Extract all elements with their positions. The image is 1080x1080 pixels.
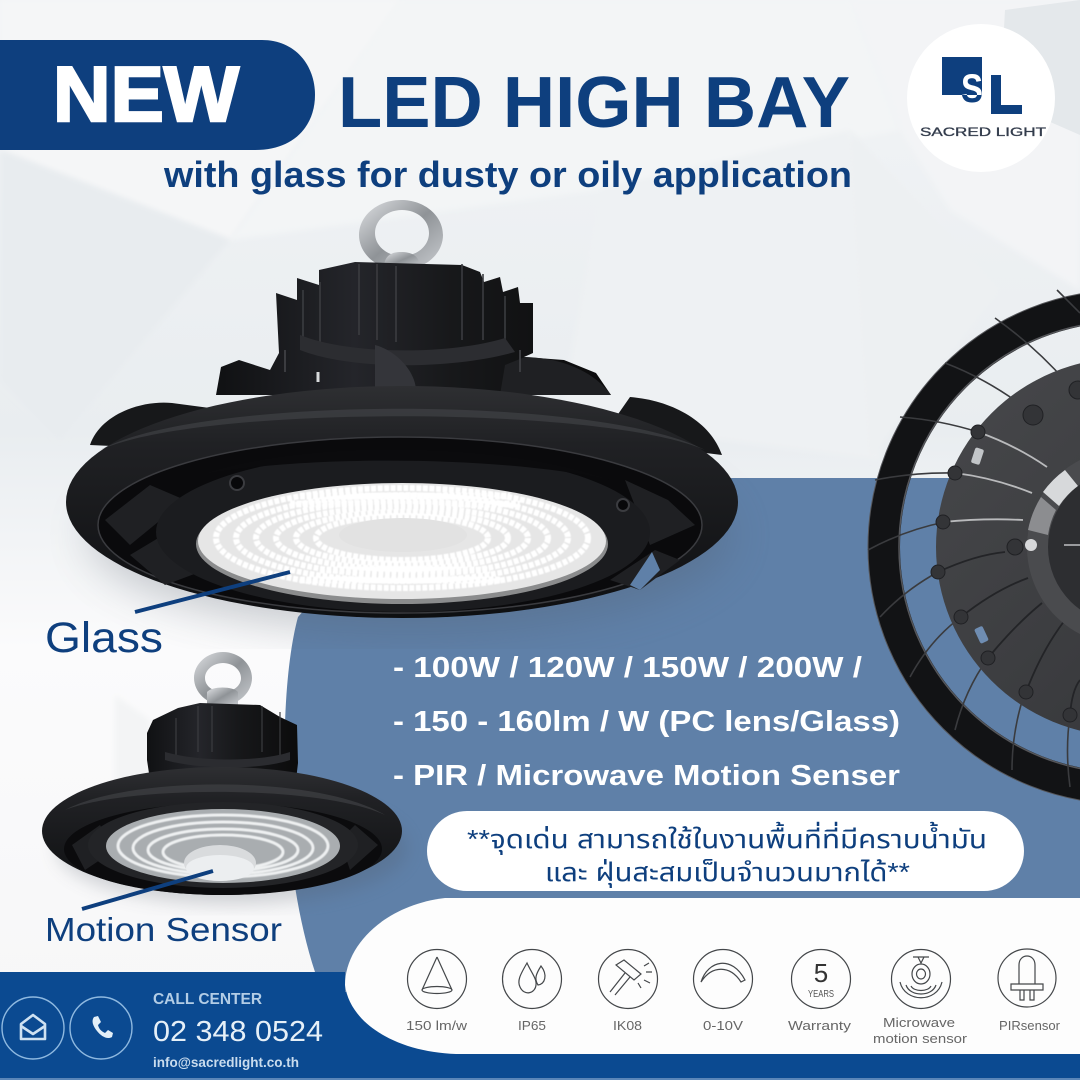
panel: blue specification background — [285, 478, 1080, 1054]
clear lens with LEDs — [106, 809, 340, 883]
wire guard — [868, 290, 1080, 787]
panel: white features band — [300, 898, 1080, 1078]
phone number: 02 348 0524 — [153, 1016, 323, 1048]
icon: 5 years warranty — [788, 950, 852, 1033]
spec: wattage: - 100W / 120W / 150W / 200W / — [393, 652, 862, 684]
eye bolt — [359, 200, 443, 270]
outer ring — [66, 386, 738, 618]
logo: Sacred Light: S — [961, 67, 983, 111]
email address: info@sacredlight.co.th — [153, 1054, 299, 1070]
icon: telephone — [70, 997, 132, 1059]
call center label: CALL CENTER — [153, 991, 262, 1008]
icon: 150 lm/w — [406, 950, 468, 1033]
logo: Sacred Light: SACRED LIGHT — [920, 127, 1046, 139]
outer ring — [42, 767, 402, 895]
icon: 5 years warranty: 5 — [814, 958, 828, 988]
motion sensor dome — [184, 845, 256, 881]
subtitle: with glass for dusty or oily application — [163, 154, 852, 195]
ventilation opening — [98, 437, 702, 613]
glass lens with LEDs — [196, 483, 608, 604]
icon: 5 years warranty: YEARS — [808, 989, 834, 1000]
icon: IP65 — [502, 950, 562, 1033]
icon: 5 years warranty: Warranty — [788, 1018, 852, 1033]
icon: microwave motion sensor: motion sensor — [873, 1031, 968, 1046]
specification list — [393, 652, 900, 792]
heat sink fins — [147, 703, 298, 780]
icon: 0-10V dimming: 0-10V — [703, 1018, 743, 1033]
inner bezel — [88, 802, 358, 888]
title: LED HIGH BAY — [338, 63, 850, 143]
icon: PIR sensor — [998, 949, 1061, 1033]
central hub — [1027, 449, 1080, 645]
logo: Sacred Light: S — [961, 67, 983, 111]
icon: envelope — [2, 997, 64, 1059]
NEW badge: NEW — [53, 50, 239, 138]
heat sink fins — [216, 262, 611, 395]
callout: Thai highlight pill: **จุดเด่น สามารถใช้ในงานพื้นที่ที่มีคราบน้ำมัน — [467, 821, 987, 855]
icon: 0-10V dimming — [694, 950, 752, 1033]
NEW badge — [0, 40, 315, 150]
callout: Thai highlight pill — [427, 811, 1024, 891]
callout: motion sensor pointer line — [82, 871, 213, 909]
label: Glass: Glass — [45, 614, 163, 662]
eye bolt — [194, 652, 252, 706]
icon: IP65: IP65 — [518, 1018, 546, 1033]
product: rear view of lamp — [868, 290, 1080, 804]
icon: microwave motion sensor: Microwave — [883, 1015, 955, 1030]
spec: sensor: - PIR / Microwave Motion Senser — [393, 760, 900, 792]
callout: Thai highlight pill: และ ฝุ่นสะสมเป็นจำนวนมากได้** — [545, 857, 910, 888]
callout: glass pointer line — [135, 572, 290, 612]
icon: PIR sensor: PIRsensor — [999, 1018, 1061, 1033]
panel: contact footer — [0, 972, 1080, 1080]
back plate — [936, 358, 1080, 736]
feature icons row — [406, 949, 1061, 1046]
spec: efficacy: - 150 - 160lm / W (PC lens/Glass) — [393, 706, 900, 738]
icon: microwave motion sensor — [873, 950, 968, 1046]
logo: Sacred Light — [907, 24, 1055, 172]
product: small high bay lamp with motion sensor — [42, 652, 407, 904]
ventilation opening — [64, 803, 382, 895]
label: Motion Sensor: Motion Sensor — [45, 911, 282, 948]
inner bezel — [156, 452, 650, 612]
icon: 150 lm/w: 150 lm/w — [406, 1018, 468, 1033]
side lugs — [90, 397, 722, 455]
ribs and knobs — [938, 432, 1080, 715]
product: large high bay lamp with glass — [66, 200, 738, 630]
icon: IK08 — [598, 950, 658, 1033]
icon: IK08: IK08 — [613, 1018, 642, 1033]
